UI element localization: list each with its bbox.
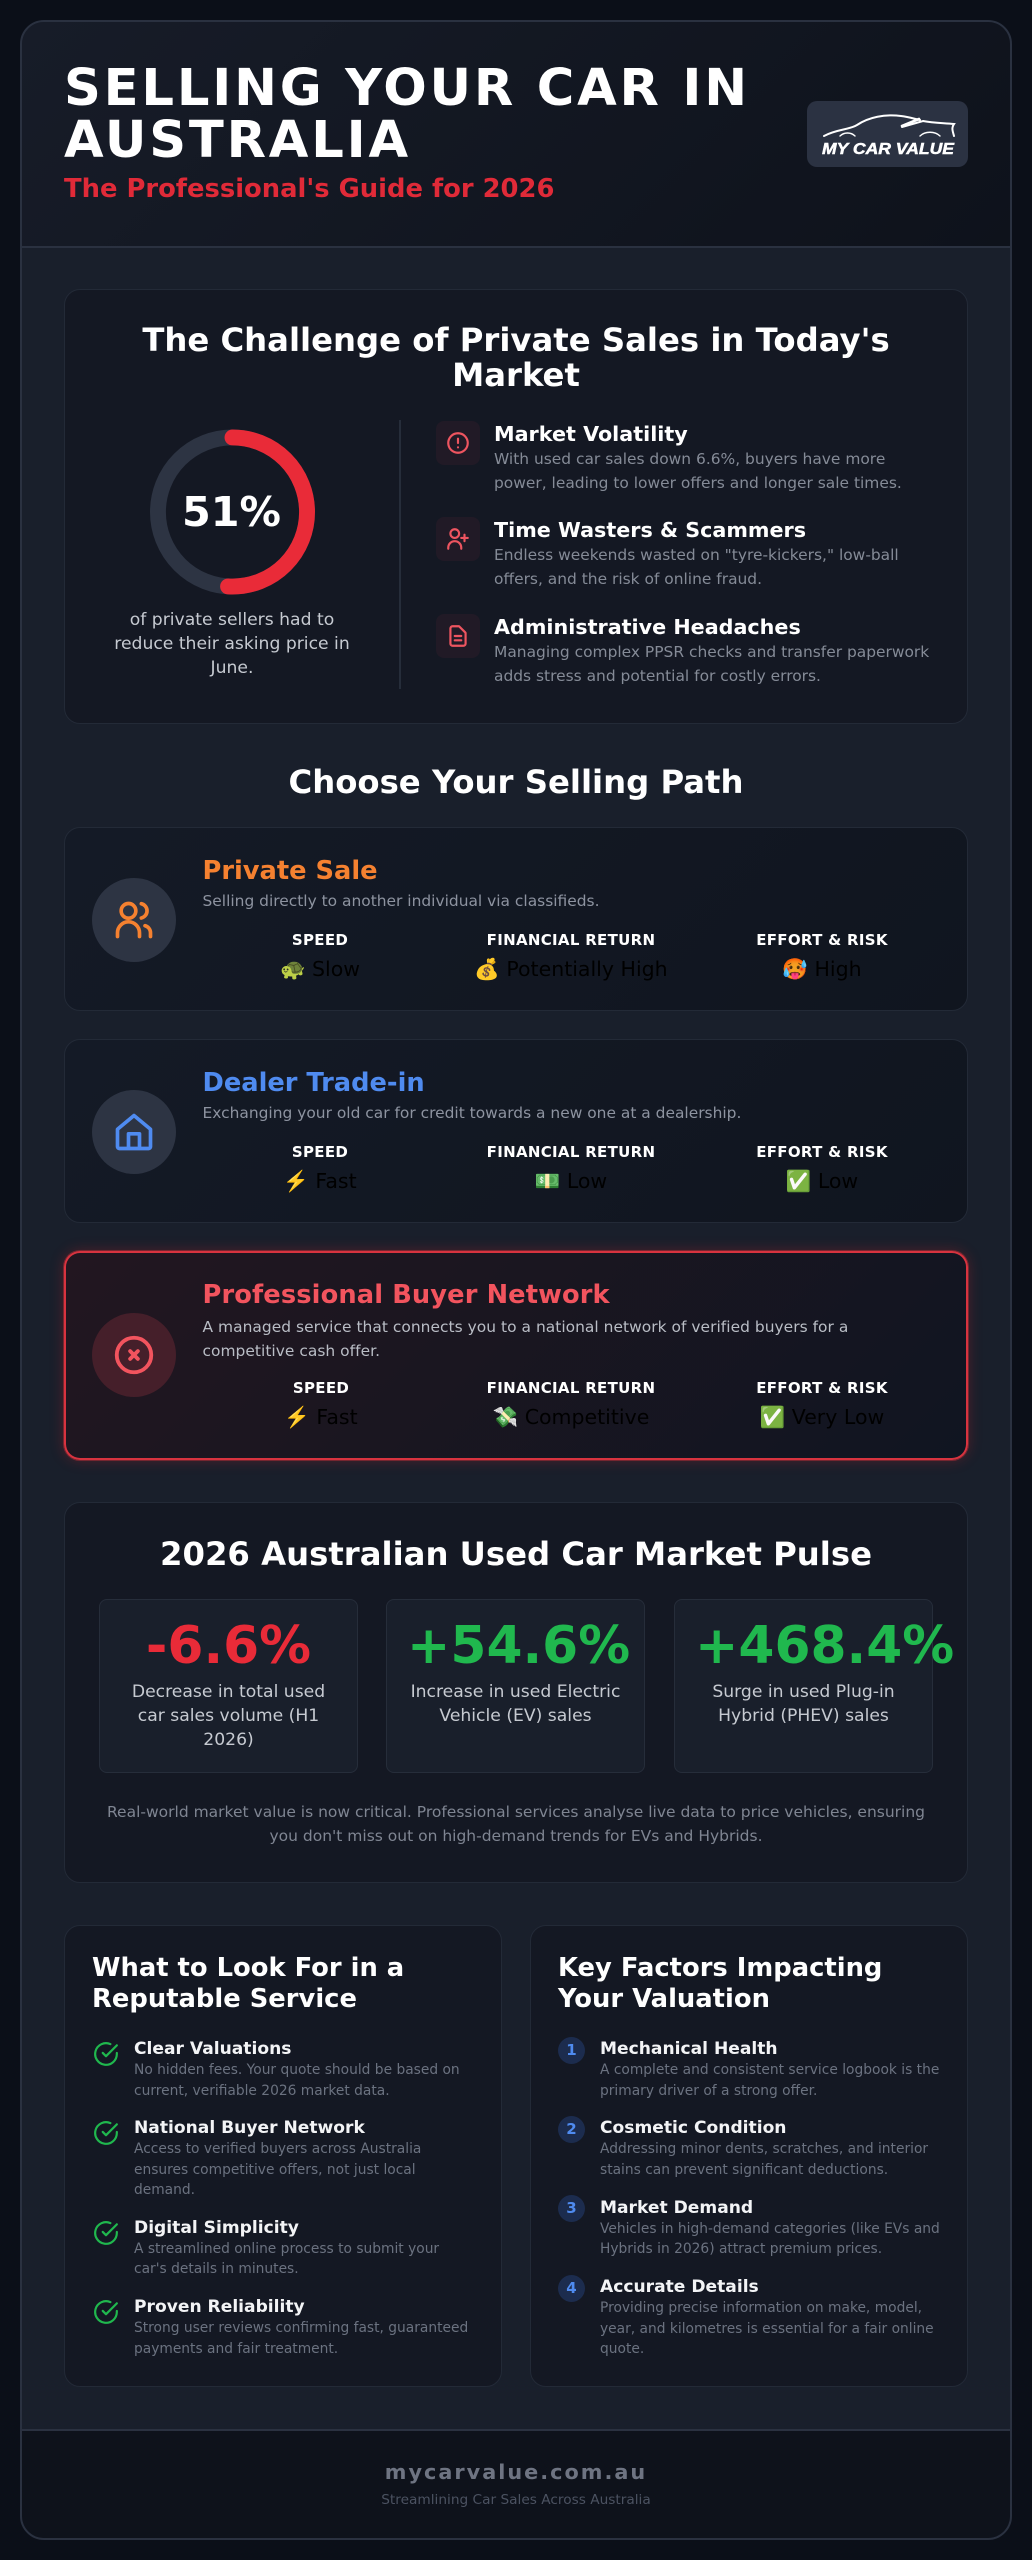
- stat caption: Hybrid (PHEV) sales: [718, 1706, 889, 1726]
- item text: [134, 2141, 421, 2198]
- item text: [600, 2298, 934, 2360]
- metric: speed: ⚡ Fast: [284, 1405, 358, 1430]
- item title: Clear Valuations: [134, 2039, 291, 2059]
- metric: effort and risk: [756, 930, 888, 982]
- metric: financial return: [474, 930, 668, 982]
- item text: Managing complex PPSR checks and transfer paperwork: [494, 643, 929, 661]
- item text: [134, 2240, 439, 2277]
- metric: speed: [283, 1142, 357, 1194]
- stat number: +54.6%: [407, 1616, 630, 1676]
- item text: Vehicles in high-demand categories (like EVs and: [600, 2220, 940, 2236]
- panel: private sale: [64, 827, 968, 1011]
- number badge: 4: [566, 2278, 577, 2296]
- option title: Private Sale: [202, 856, 378, 886]
- note: Real-world market value is now critical. Professional services analyse live data to price vehicles, ensuring: [107, 1803, 925, 1821]
- metric: financial return: FINANCIAL RETURN: [487, 1378, 655, 1396]
- note: you don't miss out on high-demand trends for EVs and Hybrids.: [269, 1827, 763, 1845]
- item text: A complete and consistent service logbook is the: [600, 2062, 939, 2078]
- item title: National Buyer Network: [134, 2118, 365, 2138]
- item title: Digital Simplicity: [134, 2218, 299, 2238]
- item title: Mechanical Health: [600, 2039, 778, 2059]
- metric: speed: [280, 930, 360, 982]
- item text: [600, 2060, 939, 2101]
- item text: [134, 2062, 460, 2099]
- stat caption: Surge in used Plug-in: [712, 1682, 895, 1702]
- item text: Strong user reviews confirming fast, guaranteed: [134, 2320, 468, 2336]
- logo: [807, 101, 968, 167]
- option description: Exchanging your old car for credit towards a new one at a dealership.: [202, 1104, 741, 1122]
- item text: No hidden fees. Your quote should be based on: [134, 2062, 460, 2078]
- stat: PHEV sales: [674, 1599, 933, 1773]
- stat caption: Vehicle (EV) sales: [439, 1706, 592, 1726]
- stat caption: Increase in used Electric: [411, 1682, 620, 1702]
- option description: [202, 1318, 848, 1360]
- stat caption: [411, 1682, 620, 1726]
- stat caption: [712, 1682, 895, 1726]
- number badge: [558, 2116, 585, 2142]
- icon: home: [92, 1090, 176, 1174]
- stat caption: [132, 1682, 325, 1750]
- donut caption: [114, 610, 350, 678]
- title: [64, 58, 750, 170]
- item title: Proven Reliability: [134, 2297, 305, 2317]
- item text: power, leading to lower offers and longer sale times.: [494, 474, 902, 492]
- metric: speed: [284, 1378, 358, 1430]
- footer: [22, 2429, 1010, 2539]
- item text: [600, 2139, 928, 2180]
- metric: effort and risk: [756, 1142, 888, 1194]
- panel: market pulse: [64, 1502, 968, 1883]
- item text: Access to verified buyers across Australia: [134, 2141, 421, 2157]
- metric: effort and risk: EFFORT & RISK: [756, 1142, 888, 1160]
- item text: Endless weekends wasted on "tyre-kickers," low-ball: [494, 546, 899, 564]
- list item: proven reliability: [94, 2297, 468, 2357]
- heading: Your Valuation: [558, 1984, 770, 2014]
- donut caption: reduce their asking price in: [114, 634, 350, 654]
- footer tagline: Streamlining Car Sales Across Australia: [381, 2492, 651, 2508]
- item text: stains can prevent significant deductions.: [600, 2162, 888, 2178]
- subtitle: The Professional's Guide for 2026: [64, 174, 554, 204]
- item text: current, verifiable 2026 market data.: [134, 2083, 390, 2099]
- item text: A streamlined online process to submit your: [134, 2240, 439, 2256]
- icon: check: [94, 2300, 118, 2324]
- donut chart 51%: [150, 430, 315, 594]
- number badge: 3: [566, 2199, 577, 2217]
- icon: check: [94, 2042, 118, 2066]
- item title: Time Wasters & Scammers: [494, 518, 806, 542]
- metric: financial return: FINANCIAL RETURN: [487, 1142, 655, 1160]
- item text: Providing precise information on make, model,: [600, 2300, 922, 2316]
- item text: primary driver of a strong offer.: [600, 2083, 817, 2099]
- item text: [600, 2218, 940, 2260]
- item text: quote.: [600, 2341, 644, 2357]
- metric: speed: SPEED: [292, 1142, 348, 1160]
- metric: effort and risk: ✅ Very Low: [760, 1405, 884, 1430]
- number badge: [558, 2036, 585, 2064]
- item title: Administrative Headaches: [494, 615, 801, 639]
- stat: EV sales: [386, 1599, 645, 1773]
- number badge: [558, 2274, 585, 2302]
- list item: market demand: [558, 2196, 958, 2256]
- heading: Reputable Service: [92, 1984, 357, 2014]
- list item: accurate details: [558, 2276, 958, 2336]
- metric: financial return: [487, 1378, 655, 1430]
- item text: year, and kilometres is essential for a fair online: [600, 2321, 934, 2337]
- heading: What to Look For in a: [92, 1952, 404, 1982]
- heading: choose your selling path: Choose Your Selling Path: [288, 762, 743, 800]
- metric: effort and risk: ✅ Low: [786, 1169, 858, 1194]
- metric: effort and risk: EFFORT & RISK: [756, 930, 888, 948]
- metric: financial return: [487, 1142, 655, 1194]
- list item: clear valuations: [94, 2039, 460, 2099]
- heading: 2026 Australian Used Car Market Pulse: [160, 1535, 872, 1573]
- heading: [92, 1952, 404, 2014]
- item text: [494, 546, 899, 588]
- option title: Dealer Trade-in: [202, 1068, 425, 1098]
- icon: x circle: [92, 1313, 176, 1397]
- metric: effort and risk: EFFORT & RISK: [756, 1378, 888, 1396]
- item title: Cosmetic Condition: [600, 2118, 786, 2138]
- metric: financial return: 💰 Potentially High: [474, 957, 668, 982]
- metric: speed: SPEED: [292, 930, 348, 948]
- metric: effort and risk: [756, 1378, 888, 1430]
- heading: Market: [452, 356, 580, 394]
- item: market volatility: [436, 421, 902, 492]
- header: [22, 22, 1010, 248]
- icon: document: [436, 614, 480, 658]
- icon: users: [92, 878, 176, 962]
- item text: With used car sales down 6.6%, buyers have more: [494, 450, 885, 468]
- icon: check: [94, 2121, 118, 2145]
- title: SELLING YOUR CAR IN: [64, 58, 750, 118]
- panel: what to look for: [64, 1925, 502, 2387]
- item: time wasters: [436, 517, 899, 588]
- metric: speed: 🐢 Slow: [280, 957, 360, 982]
- metric: financial return: 💵 Low: [535, 1169, 607, 1194]
- item text: Hybrids in 2026) attract premium prices.: [600, 2241, 882, 2257]
- option description: competitive cash offer.: [202, 1342, 380, 1360]
- icon: check: [94, 2221, 118, 2245]
- list item: digital simplicity: [94, 2218, 439, 2277]
- item text: ensures competitive offers, not just local: [134, 2162, 416, 2178]
- item text: demand.: [134, 2182, 195, 2198]
- heading: Key Factors Impacting: [558, 1952, 882, 1982]
- stat number: +468.4%: [695, 1616, 954, 1676]
- item text: Addressing minor dents, scratches, and interior: [600, 2141, 928, 2157]
- metric: financial return: 💸 Competitive: [493, 1405, 649, 1430]
- item text: payments and fair treatment.: [134, 2341, 338, 2357]
- option description: Selling directly to another individual via classifieds.: [202, 892, 600, 910]
- icon: user plus: [436, 517, 480, 561]
- stat: decrease in sales: [99, 1599, 358, 1773]
- heading: The Challenge of Private Sales in Today's: [142, 321, 890, 359]
- footer site name: mycarvalue.com.au: [385, 2460, 647, 2484]
- panel: key factors: [530, 1925, 968, 2387]
- divider: [399, 420, 401, 689]
- item text: [494, 643, 929, 685]
- logo: MY CAR VALUE: [822, 141, 955, 158]
- number badge: [558, 2195, 585, 2222]
- panel: professional buyer network: [64, 1251, 968, 1460]
- item text: offers, and the risk of online fraud.: [494, 570, 762, 588]
- stat caption: Decrease in total used: [132, 1682, 325, 1702]
- donut caption: of private sellers had to: [130, 610, 334, 630]
- option description: A managed service that connects you to a national network of verified buyers for a: [202, 1318, 848, 1336]
- panel: dealer trade-in: [64, 1039, 968, 1223]
- icon: alert circle: [436, 421, 480, 465]
- panel: the challenge: [64, 289, 968, 724]
- option title: Professional Buyer Network: [202, 1280, 610, 1310]
- donut caption: June.: [211, 658, 253, 678]
- title: AUSTRALIA: [64, 110, 411, 170]
- note: [107, 1803, 925, 1845]
- metric: speed: ⚡ Fast: [283, 1169, 357, 1194]
- list item: mechanical health: [558, 2037, 939, 2099]
- list item: national buyer network: [94, 2118, 421, 2198]
- donut chart 51%: 51%: [182, 488, 280, 536]
- metric: effort and risk: 🥵 High: [782, 957, 862, 982]
- item text: [494, 450, 902, 492]
- item: administrative headaches: [436, 614, 929, 685]
- number badge: 1: [566, 2040, 577, 2058]
- item title: Accurate Details: [600, 2277, 759, 2297]
- stat caption: 2026): [203, 1730, 254, 1750]
- metric: speed: SPEED: [293, 1378, 349, 1396]
- list item: cosmetic condition: [558, 2117, 958, 2177]
- metric: financial return: FINANCIAL RETURN: [487, 930, 655, 948]
- number badge: 2: [566, 2120, 577, 2138]
- stat number: -6.6%: [146, 1616, 311, 1676]
- item title: Market Demand: [600, 2198, 753, 2218]
- item text: [134, 2320, 468, 2357]
- heading: [558, 1952, 882, 2014]
- item text: car's details in minutes.: [134, 2261, 299, 2277]
- stat caption: car sales volume (H1: [138, 1706, 319, 1726]
- heading: [142, 321, 890, 394]
- item title: Market Volatility: [494, 422, 688, 446]
- item text: adds stress and potential for costly errors.: [494, 667, 821, 685]
